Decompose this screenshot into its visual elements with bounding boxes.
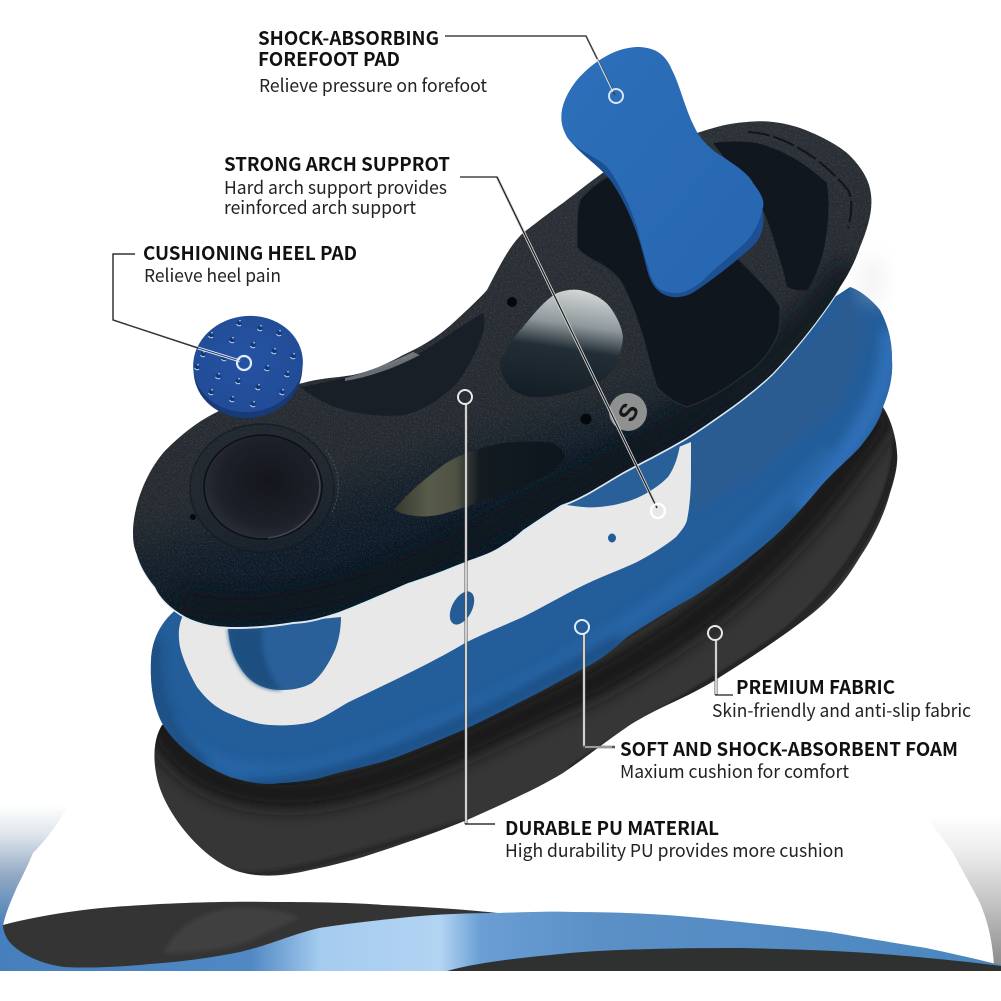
text block: PU material: DURABLE PU MATERIAL [505,814,719,841]
dark wave right [447,948,1001,971]
blue arch opening [567,445,680,507]
callout line: fabric [708,626,733,695]
dark wave left [3,902,498,968]
text block: premium fabric [712,673,971,723]
text block: forefoot pad: FOREFOOT PAD [258,45,400,72]
callout line: heel pad [113,254,251,370]
bottom band: dark and blue waves [0,902,1001,971]
text block: foam [620,735,958,784]
callout line: arch support [460,177,665,518]
right corner swoosh [925,815,1001,965]
text block: arch support: STRONG ARCH SUPPROT [224,150,450,177]
forefoot recess left [577,176,780,407]
heel cup [204,435,322,539]
left blue base [0,925,90,971]
text block: premium fabric: Skin-friendly and anti-slip fabric [712,697,971,723]
icon: shock-absorbing forefoot pad [561,47,764,297]
text block: premium fabric: PREMIUM FABRIC [736,673,895,700]
layer: shock-absorbent foam (blue) [151,285,892,786]
layer: premium fabric (charcoal) [151,407,897,876]
text block: forefoot pad: SHOCK-ABSORBING [258,24,439,51]
small vent holes [507,297,517,307]
left corner swoosh [0,805,68,971]
text block: foam: Maxium cushion for comfort [620,758,849,784]
sole light edge [133,289,840,629]
text block: arch support: Hard arch support provides [224,174,447,200]
logo badge: S [613,399,645,426]
blue wave [0,912,1001,971]
text block: arch support [224,150,450,220]
metatarsal gloss pocket [500,290,623,397]
forefoot recess right [713,142,828,290]
text block: heel pad: CUSHIONING HEEL PAD [143,239,357,266]
foam holes [445,534,616,629]
white top cover of foam [179,442,691,725]
text block: heel pad [143,239,357,288]
callout line: forefoot pad [445,36,623,103]
icon: cushioning heel pad [187,309,309,425]
sole grain texture [125,115,880,635]
dark wave highlight [163,908,300,953]
lower arch pocket [394,442,565,516]
text block: foam: SOFT AND SHOCK-ABSORBENT FOAM [620,735,958,762]
text block: PU material: High durability PU provides more cushion [505,837,844,863]
logo badge [609,393,647,431]
callout line: PU material [458,390,495,824]
sole dark lower edge [180,270,850,607]
text block: heel pad: Relieve heel pain [144,262,281,288]
blue heel opening [228,617,341,690]
text block: PU material [505,814,844,863]
heel ring [190,424,334,552]
text block: arch support: reinforced arch support [224,194,416,220]
arch recess [300,313,485,416]
callout line: foam [575,620,615,747]
text block: forefoot pad [258,24,487,98]
layer: durable PU sole [125,115,880,635]
toe grooves [748,132,851,228]
text block: forefoot pad: Relieve pressure on forefoot [259,72,487,98]
soft shadow behind sole [858,254,886,306]
